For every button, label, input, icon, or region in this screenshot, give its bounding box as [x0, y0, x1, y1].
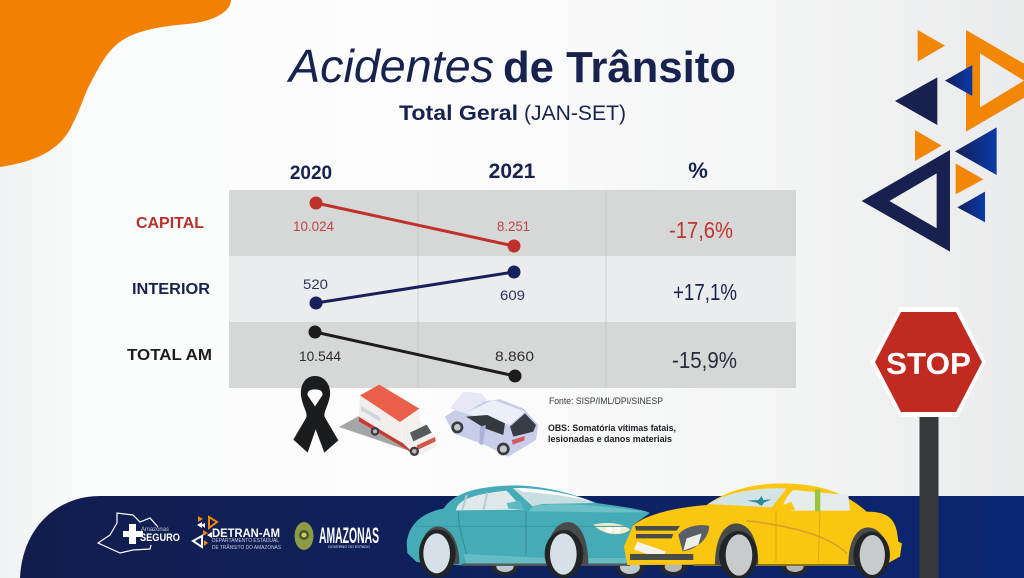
illustration: two cars colliding — [407, 483, 902, 578]
column headers: 2021 — [489, 160, 536, 183]
stop sign — [870, 307, 986, 578]
far-side wheels — [492, 559, 808, 578]
yellow car — [624, 483, 902, 578]
row: total am: TOTAL AM — [127, 347, 212, 364]
row: interior — [132, 266, 737, 310]
footer band — [20, 496, 1024, 578]
subtitle: (JAN-SET) — [524, 102, 626, 125]
observation note — [548, 423, 676, 445]
row: capital: CAPITAL — [136, 215, 204, 232]
logo: Detran-AM — [193, 516, 282, 551]
icon: ambulance — [339, 385, 437, 456]
icon: black ribbon — [293, 376, 338, 453]
logo: Amazonas Seguro: Amazonas — [141, 527, 169, 533]
orange corner shape — [0, 0, 231, 167]
observation note: lesionadas e danos materiais — [548, 434, 672, 445]
logo: Amazonas Seguro — [98, 513, 180, 553]
row: total am: -15,9% — [672, 347, 737, 373]
row: total am — [127, 326, 737, 382]
title: Acidentes — [286, 40, 494, 92]
column headers: 2020 — [290, 163, 332, 184]
row: interior: 520 — [303, 276, 328, 292]
stop sign: STOP — [886, 346, 971, 381]
source note: Fonte: SISP/IML/DPI/SINESP — [549, 396, 663, 407]
row: interior: +17,1% — [673, 279, 737, 305]
row: capital — [136, 196, 733, 252]
observation note: OBS: Somatória vítimas fatais, — [548, 423, 676, 434]
icon: damaged white car — [445, 392, 538, 457]
subtitle: Total Geral — [399, 102, 518, 125]
data table panel — [229, 190, 796, 388]
subtitle — [399, 102, 626, 125]
teal car — [407, 485, 650, 578]
row: total am: 8.860 — [495, 348, 534, 364]
logo: Detran-AM: DEPARTAMENTO ESTADUAL — [212, 538, 279, 544]
row: interior: INTERIOR — [132, 281, 210, 298]
row: capital: -17,6% — [669, 217, 733, 243]
title — [286, 40, 736, 92]
logo: Detran-AM: DE TRÂNSITO DO AMAZONAS — [212, 544, 282, 551]
column headers: % — [688, 158, 708, 183]
row: capital: 8.251 — [497, 218, 530, 234]
row: interior: 609 — [500, 287, 525, 303]
logo: Detran-AM: DETRAN-AM — [212, 526, 280, 540]
logo: Amazonas Seguro: SEGURO — [140, 532, 180, 544]
logo: Governo do Amazonas — [294, 522, 379, 550]
infographic canvas: AMAZONAS — [319, 523, 379, 548]
row: capital: 10.024 — [293, 218, 334, 234]
column headers — [290, 158, 708, 184]
title: de Trânsito — [503, 43, 736, 92]
decorative triangles — [862, 30, 1024, 252]
logo: Governo do Amazonas: GOVERNO DO ESTADO — [328, 544, 370, 549]
row: total am: 10.544 — [299, 348, 341, 364]
